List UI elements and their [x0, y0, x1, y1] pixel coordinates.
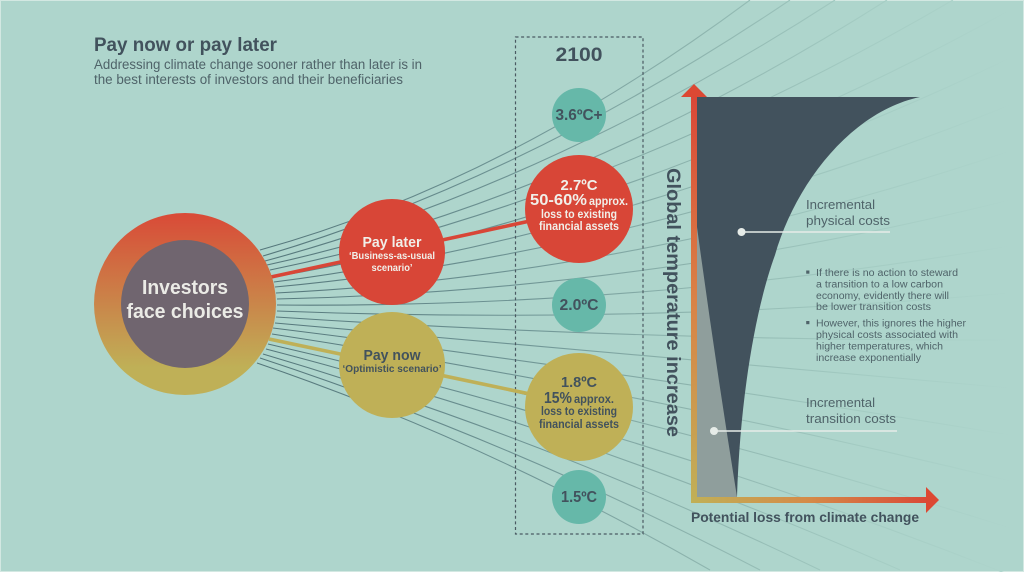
area: incremental transition costs: [697, 227, 737, 497]
dashed box: 2100: [516, 37, 643, 534]
callout: incremental physical costs: Incremental: [806, 197, 875, 212]
bullet: higher physical costs: increase exponentially: [816, 353, 921, 364]
title block: Addressing climate change sooner rather than later is in: [94, 57, 422, 72]
callout: incremental transition costs: transition costs: [806, 411, 897, 426]
pay later circle: [339, 199, 445, 305]
circle: 1.5C: [552, 470, 606, 524]
x axis arrow: [691, 487, 939, 513]
red line: pay later path: [271, 221, 530, 277]
circle: 2.7C: 50-60%: [530, 192, 587, 209]
circle: 1.8C: [525, 353, 633, 461]
pay later circle: scenario’: [372, 263, 413, 274]
bullet: higher physical costs: physical costs associated with: [816, 330, 958, 341]
bullet: higher physical costs: higher temperatures, which: [816, 342, 943, 352]
title block: [94, 35, 422, 87]
pay later circle: ‘Business-as-usual: [349, 251, 435, 262]
circle: 2.7C: approx.: [589, 196, 628, 208]
circle: 2.7C: 2.7ºC: [560, 177, 598, 194]
bullet: higher physical costs: [806, 319, 967, 364]
fan of scenario lines: [257, 0, 1010, 572]
heading: 2100: 2100: [556, 44, 603, 66]
circle: 1.8C: 15%: [544, 390, 572, 407]
pay later circle: Pay later: [362, 235, 422, 251]
bullet: higher physical costs: However, this ignores the higher: [816, 319, 967, 330]
investors circle: face choices: [126, 301, 244, 323]
investors circle: Investors: [142, 277, 228, 299]
circle: 3.6C: 3.6ºC+: [556, 107, 602, 124]
circle: 1.8C: loss to existing: [541, 406, 617, 418]
y axis arrow: [681, 84, 707, 503]
circle: 2.0C: [552, 278, 606, 332]
pay now circle: ‘Optimistic scenario’: [342, 364, 442, 375]
callout: incremental transition costs: Incremental: [806, 395, 875, 410]
bullet: no action: If there is no action to steward: [816, 268, 958, 279]
circle: 1.8C: financial assets: [539, 419, 619, 431]
circle: 1.8C: 1.8ºC: [561, 374, 597, 391]
callout: incremental physical costs: physical costs: [806, 213, 891, 228]
x axis label: Potential loss from climate change: [691, 509, 919, 525]
bullet: no action: economy, evidently there will: [816, 291, 949, 302]
circle: 2.7C: [525, 155, 633, 263]
title block: the best interests of investors and their beneficiaries: [94, 72, 403, 87]
circle: 2.0C: 2.0ºC: [560, 297, 598, 314]
callout: incremental physical costs: [738, 197, 891, 236]
gold line: pay now path: [269, 339, 530, 394]
investors circle: [94, 213, 276, 395]
area chart: cost curves: [697, 97, 920, 497]
bullet: no action: be lower transition costs: [816, 302, 931, 313]
callout: incremental transition costs: [710, 395, 897, 435]
area: incremental physical costs: [697, 97, 920, 497]
y axis label: Global temperature increase: [662, 168, 684, 437]
title block: Pay now or pay later: [94, 35, 278, 56]
circle: 3.6C: [552, 88, 606, 142]
bullet: no action: [806, 268, 958, 313]
pay now circle: Pay now: [364, 348, 421, 364]
circle: 1.8C: approx.: [574, 394, 614, 406]
circle: 2.7C: loss to existing: [541, 209, 617, 221]
circle: 1.5C: 1.5ºC: [561, 489, 597, 506]
circle: 2.7C: financial assets: [539, 221, 619, 233]
pay now circle: [339, 312, 445, 418]
bullet: no action: a transition to a low carbon: [816, 280, 943, 290]
